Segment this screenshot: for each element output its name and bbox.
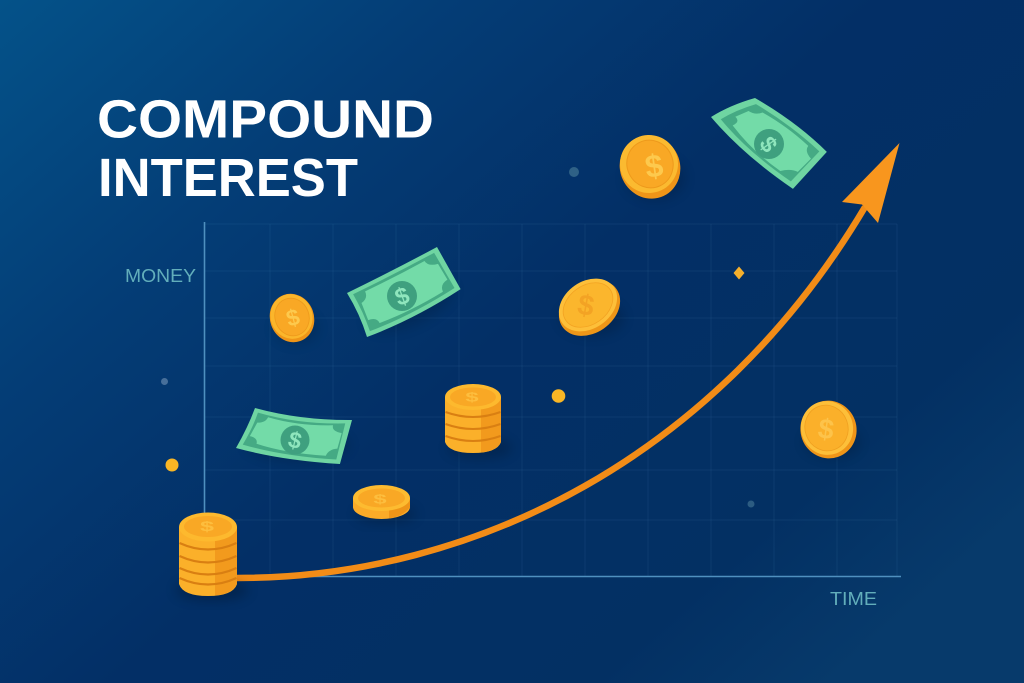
title: INTEREST — [98, 148, 358, 208]
x axis label: time: TIME — [830, 589, 877, 609]
growth arrow — [237, 143, 900, 578]
coin: right — [792, 393, 865, 466]
coin: upper left: $ — [283, 303, 303, 332]
coin: upper left — [263, 287, 321, 349]
decorative dots — [161, 167, 754, 508]
bill: upper middle: $ — [391, 282, 414, 312]
bill: upper middle — [347, 245, 462, 343]
x axis — [237, 576, 901, 578]
coin: flat: $ — [373, 493, 387, 507]
coin stack: base: $ — [200, 520, 214, 534]
coin: centre — [548, 268, 631, 347]
title — [97, 90, 434, 208]
bill: top right: $ — [754, 132, 783, 157]
bill: lower left — [234, 408, 360, 465]
y axis — [204, 222, 206, 520]
title: COMPOUND — [97, 90, 434, 150]
bill: lower left: $ — [286, 426, 305, 454]
coin: top — [609, 125, 691, 209]
coin: flat — [353, 485, 416, 523]
coin: right: $ — [816, 413, 836, 445]
coin stack: middle: $ — [465, 391, 479, 405]
coin: centre: $ — [575, 289, 597, 323]
coin: top: $ — [643, 147, 666, 185]
coin stack: middle — [445, 384, 512, 458]
bill: top right — [702, 95, 848, 189]
coin stack: base — [176, 512, 248, 600]
y axis label: money: MONEY — [125, 266, 196, 286]
